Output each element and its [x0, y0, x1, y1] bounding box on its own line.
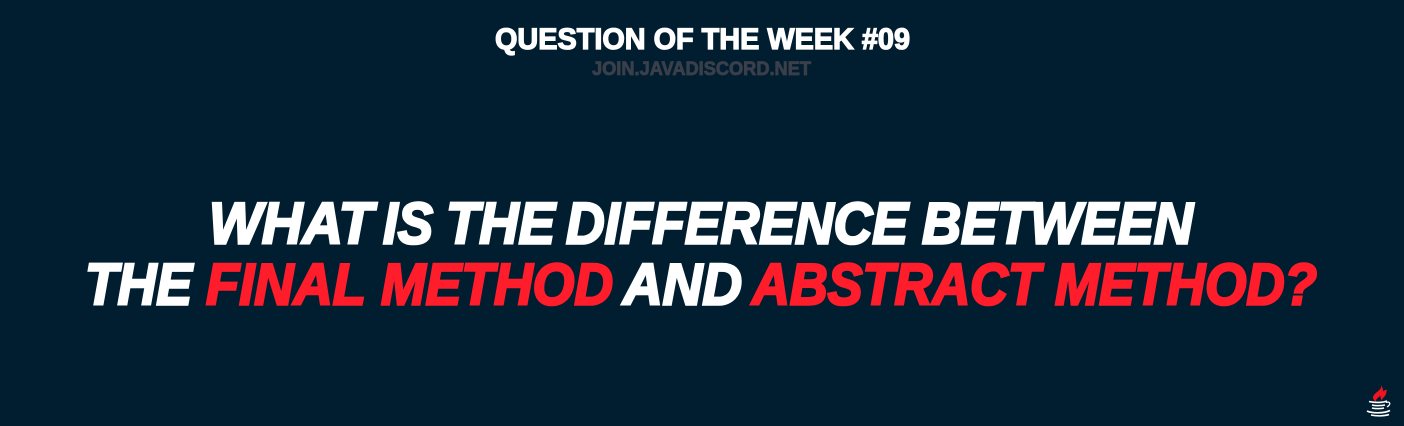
headline line 2: METHOD	[381, 252, 613, 318]
headline line 2: AND	[621, 252, 742, 318]
headline line 1: DIFFERENCE	[566, 192, 910, 256]
title: QUESTION OF THE WEEK #09	[495, 23, 910, 56]
headline line 1: BETWEEN	[922, 192, 1194, 256]
subtitle link: JOIN.JAVADISCORD.NET	[592, 59, 811, 80]
headline line 2: THE	[85, 252, 194, 318]
headline line 1	[209, 192, 1194, 256]
icon: java coffee cup logo	[1367, 385, 1390, 416]
headline	[85, 192, 1317, 318]
headline line 2	[85, 252, 1317, 318]
headline line 1: THE	[446, 192, 557, 256]
headline line 2: FINAL	[206, 252, 366, 318]
headline line 1: WHAT	[209, 192, 377, 256]
headline line 1: IS	[383, 192, 433, 256]
headline line 2: ABSTRACT	[750, 252, 1044, 318]
headline line 2: METHOD?	[1055, 252, 1317, 318]
